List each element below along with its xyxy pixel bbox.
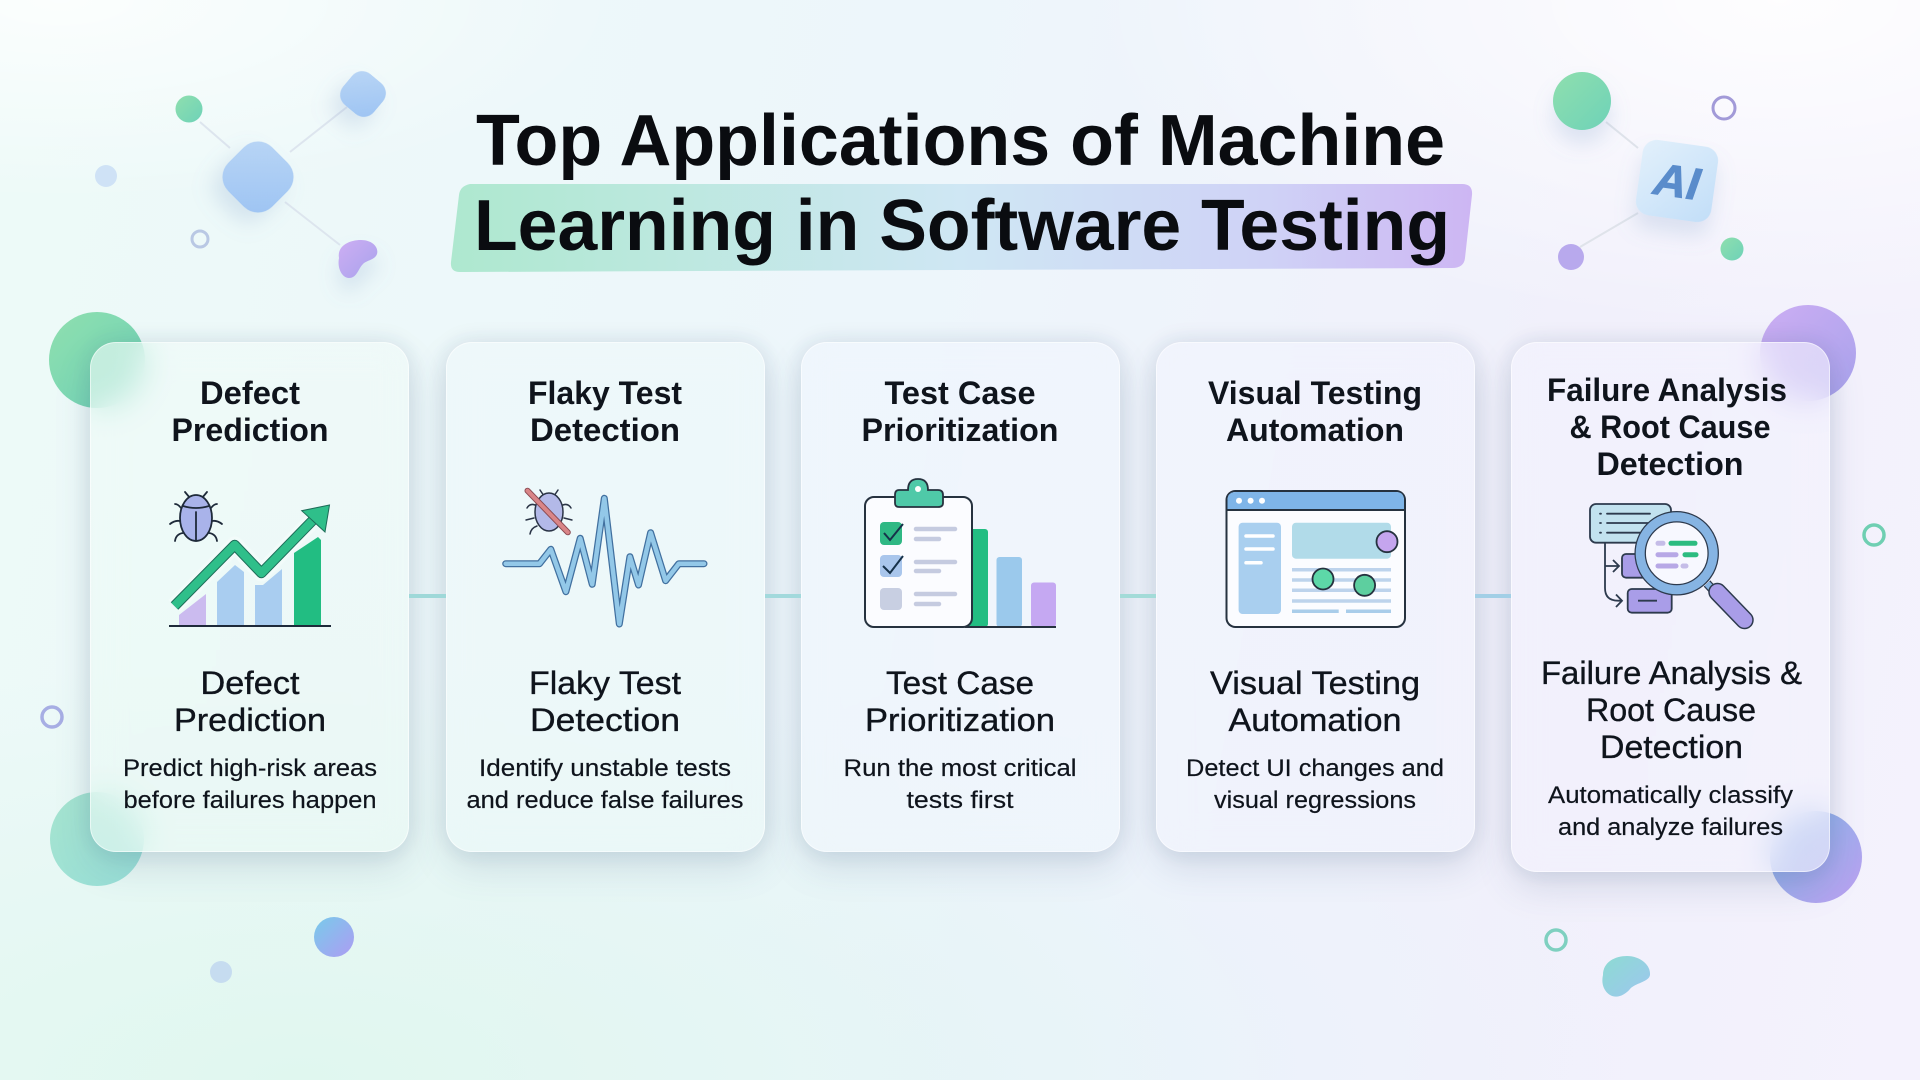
small dots and rings: bottom left	[42, 707, 354, 983]
big corner circles	[49, 305, 1862, 903]
card description: Detect UI changes and	[1186, 754, 1444, 782]
card heading	[171, 374, 328, 448]
panel: flaky test detection	[446, 342, 765, 852]
network cluster: AI top right: AI	[1650, 153, 1705, 210]
card heading: Detection	[530, 412, 680, 448]
card heading: & Root Cause	[1569, 408, 1770, 444]
card heading	[528, 374, 682, 448]
card title	[528, 664, 681, 738]
card title: Defect	[200, 664, 299, 700]
card heading	[861, 374, 1058, 448]
card title	[174, 664, 326, 738]
card heading: Automation	[1226, 412, 1404, 448]
icon: bug with rising chart	[168, 492, 330, 626]
card title: Automation	[1228, 702, 1401, 738]
card description	[1548, 782, 1792, 840]
card description: and analyze failures	[1558, 814, 1783, 840]
small dots and rings: bottom right	[1546, 525, 1884, 997]
card title: Prediction	[174, 702, 326, 738]
card title	[1210, 664, 1420, 738]
card heading: Flaky Test	[528, 374, 682, 410]
card title	[864, 664, 1054, 738]
icon: crossed bug and unstable signal	[505, 490, 704, 624]
card title: Failure Analysis &	[1540, 654, 1802, 690]
connector: card 3 to 4	[1120, 594, 1156, 598]
card heading: Prediction	[171, 412, 328, 448]
title	[451, 101, 1472, 272]
card description	[1186, 754, 1444, 814]
card heading: Failure Analysis	[1546, 372, 1786, 408]
card description: Identify unstable tests	[478, 754, 730, 782]
card description: visual regressions	[1214, 786, 1416, 814]
card description: tests first	[906, 786, 1013, 814]
card description: Predict high-risk areas	[122, 754, 376, 782]
icon: log flow and magnifying glass	[1590, 504, 1744, 620]
card description	[122, 754, 376, 814]
card heading: Defect	[200, 374, 300, 410]
icon: clipboard checklist and priority bars	[864, 478, 1056, 626]
card title: Flaky Test	[528, 664, 681, 700]
title: Learning in Software Testing	[474, 186, 1450, 266]
panel: test case prioritization	[801, 342, 1120, 852]
card title	[1540, 654, 1802, 764]
card heading	[1208, 374, 1422, 448]
card title: Visual Testing	[1210, 664, 1420, 700]
network cluster: AI top right	[1553, 72, 1744, 270]
title: Top Applications of Machine	[476, 101, 1445, 181]
card heading: Visual Testing	[1208, 374, 1422, 410]
network cluster: top left	[95, 66, 391, 278]
card description: Run the most critical	[843, 754, 1076, 782]
card title: Root Cause	[1586, 692, 1756, 728]
connector: card 2 to 3	[765, 594, 801, 598]
icon: browser window with detected changes	[1226, 490, 1404, 626]
card title: Prioritization	[864, 702, 1054, 738]
card description: and reduce false failures	[466, 786, 743, 814]
panel: visual testing automation	[1156, 342, 1475, 852]
connector: card 4 to 5	[1475, 594, 1511, 598]
card description	[843, 754, 1076, 814]
card title: Detection	[1600, 728, 1742, 764]
panel: failure analysis and root cause detection	[1511, 342, 1830, 872]
card description: before failures happen	[123, 786, 376, 814]
card heading	[1546, 372, 1786, 482]
card heading: Detection	[1596, 446, 1743, 482]
card title: Detection	[530, 702, 680, 738]
card description: Automatically classify	[1548, 782, 1792, 808]
card description	[466, 754, 743, 814]
card heading: Test Case	[884, 374, 1035, 410]
title highlight band	[451, 184, 1472, 272]
panel: defect prediction	[90, 342, 409, 852]
card title: Test Case	[886, 664, 1034, 700]
connector: card 1 to 2	[409, 594, 446, 598]
card heading: Prioritization	[861, 412, 1058, 448]
